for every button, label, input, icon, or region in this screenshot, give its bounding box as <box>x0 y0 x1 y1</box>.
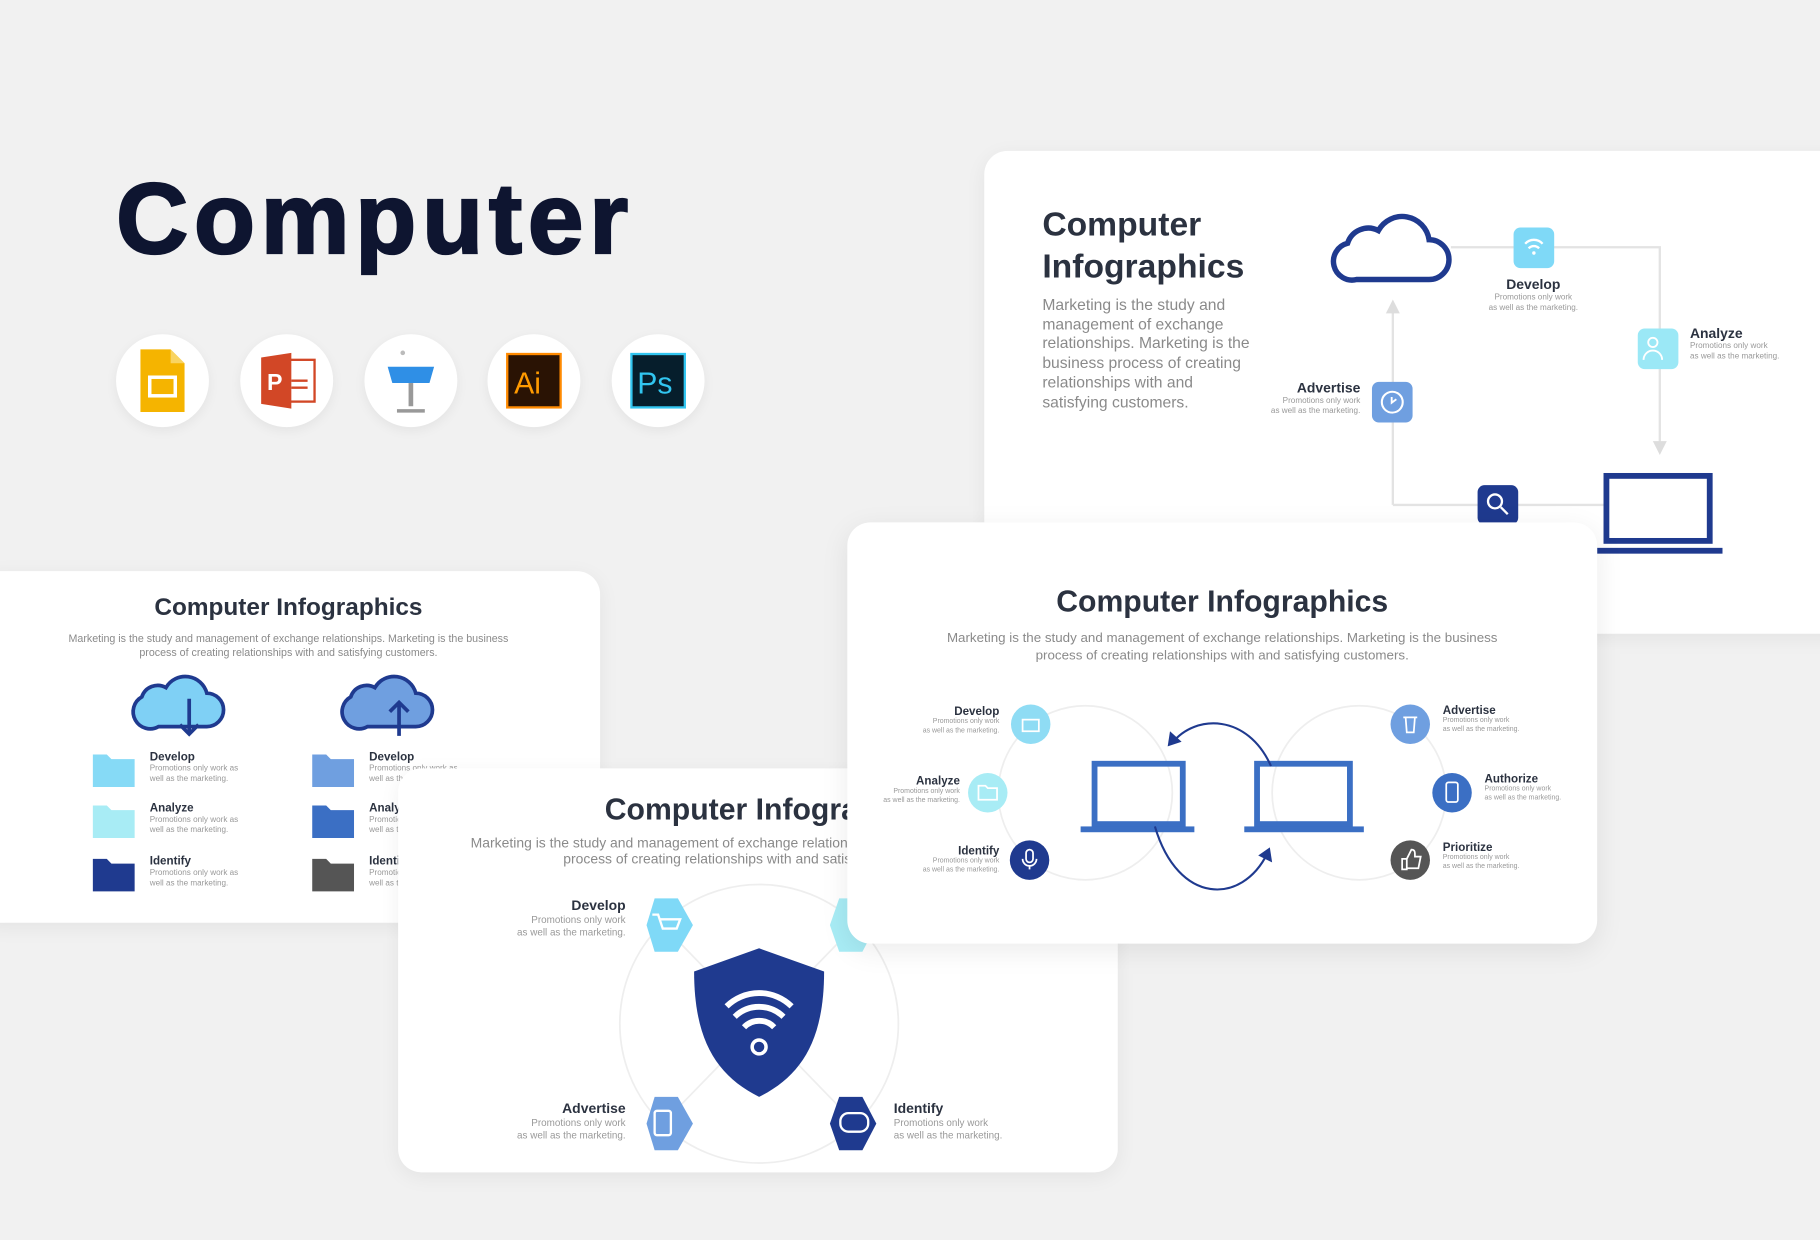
label: analyze: Promotions only work <box>1690 342 1768 351</box>
panel: left slide: Develop <box>369 751 414 764</box>
rows: well as the marketing. <box>150 775 228 783</box>
flow diagram <box>1330 214 1722 554</box>
panel: left slide: Promotions only work as <box>150 816 238 824</box>
panel: top-right slide <box>984 151 1820 634</box>
text block: process of creating relationships with and satisfying customers. <box>1036 648 1409 662</box>
left labels <box>923 706 1000 734</box>
icon: powerpoint <box>240 334 333 427</box>
right labels <box>1443 705 1519 733</box>
panel: left slide: Promotions only work as <box>150 869 238 877</box>
rows: Develop <box>150 751 195 764</box>
label: identify: as well as the marketing. <box>894 1129 1002 1140</box>
heading: Computer Infographics <box>1056 584 1388 619</box>
panel: left slide: well as the marketing. <box>369 880 448 888</box>
panel: left slide: well as the marketing. <box>150 880 228 888</box>
rows <box>150 751 238 783</box>
heading: Computer <box>1042 207 1201 244</box>
label: develop: Develop <box>571 897 626 913</box>
right labels: as well as the marketing. <box>1443 726 1519 733</box>
panel: middle slide: Prioritize <box>1443 842 1492 854</box>
app icons row <box>116 334 704 429</box>
label: develop: as well as the marketing. <box>517 926 626 937</box>
label: analyze <box>1690 325 1779 361</box>
label: advertise <box>517 1100 626 1140</box>
text block: Marketing is the study and management of exchange relationships. Marketing is the business <box>947 631 1497 645</box>
panel: left slide: Analyze <box>369 802 413 815</box>
panel: middle slide: Promotions only work <box>1485 786 1551 793</box>
icon: illustrator: Ai <box>514 367 541 400</box>
text block: Marketing is the study and management of exchange relationships. Marketing is the business process of creating relationships with and satisfying customers. <box>1042 296 1250 410</box>
panel: middle slide: as well as the marketing. <box>1443 863 1519 870</box>
panel: left slide: Promotions only work as <box>369 869 458 877</box>
panel: middle slide: as well as the marketing. <box>883 797 960 804</box>
panel: left slide: Promotions only work as <box>369 816 458 824</box>
left labels: as well as the marketing. <box>923 727 999 734</box>
text block: Marketing is the study and management of exchange relationships. Marketing is the business process of creating relationships with and satisfying customers. <box>69 633 508 658</box>
label: develop: Develop <box>1506 276 1560 292</box>
label: develop: as well as the marketing. <box>1489 304 1578 312</box>
icon: keynote <box>364 334 457 427</box>
panel: middle slide: Promotions only work <box>1443 854 1509 861</box>
panel: middle slide: as well as the marketing. <box>1485 795 1561 801</box>
text block: process of creating relationships with and satisfying customers. <box>563 851 953 867</box>
label: advertise: Advertise <box>1297 380 1360 396</box>
icon: google slides <box>116 334 209 427</box>
icon: photoshop <box>612 334 705 427</box>
rows: Promotions only work as <box>150 765 238 773</box>
label: advertise: Advertise <box>562 1100 626 1117</box>
right labels: Advertise <box>1443 705 1496 717</box>
text block <box>947 631 1497 662</box>
panel: left slide: Identify <box>369 855 410 868</box>
panel: middle slide: as well as the marketing. <box>923 866 999 873</box>
label: advertise: as well as the marketing. <box>517 1129 626 1140</box>
panel: left slide: Promotions only work as <box>369 765 458 773</box>
laptop <box>1606 476 1710 541</box>
text block: Marketing is the study and management of exchange relationships. Marketing is the business <box>471 835 1045 851</box>
panel: left slide: Analyze <box>150 802 194 815</box>
label: develop <box>1489 276 1578 312</box>
panel: middle slide: Promotions only work <box>893 788 960 795</box>
panel: left slide: well as the marketing. <box>150 826 228 835</box>
left labels: Promotions only work <box>933 718 999 725</box>
heading: Computer Infographics <box>605 792 937 826</box>
panel: bottom slide <box>398 768 1118 1172</box>
label: analyze: as well as the marketing. <box>1690 353 1779 361</box>
label: develop <box>517 897 626 938</box>
heading: Computer Infographics <box>154 594 422 621</box>
label: identify: Identify <box>894 1100 943 1117</box>
cloud <box>1333 216 1449 280</box>
label: advertise: Promotions only work <box>1283 397 1360 405</box>
laptop cycle diagram <box>968 704 1472 890</box>
icons <box>1514 227 1554 268</box>
panel: left slide: well as the marketing. <box>369 826 448 835</box>
panel: middle slide: Identify <box>958 845 999 858</box>
heading <box>1042 207 1244 286</box>
panel: left slide <box>0 571 600 923</box>
label: analyze: Analyze <box>1690 325 1743 341</box>
panel: middle slide: Analyze <box>916 775 960 788</box>
title: Computer <box>116 164 634 275</box>
icon: illustrator <box>487 334 580 427</box>
label: advertise <box>1271 380 1360 416</box>
label: identify: Promotions only work <box>894 1117 988 1128</box>
right labels: Promotions only work <box>1443 717 1509 724</box>
panel: left slide: Identify <box>150 855 191 868</box>
label: develop: Promotions only work <box>531 913 626 925</box>
clouds and folders <box>92 674 434 892</box>
label: develop: Promotions only work <box>1494 294 1572 302</box>
panel: left slide: well as the marketing. <box>369 775 448 783</box>
label: advertise: as well as the marketing. <box>1271 407 1360 416</box>
left labels: Develop <box>954 706 999 718</box>
label: identify <box>894 1100 1002 1140</box>
panel: middle slide: Authorize <box>1485 773 1538 786</box>
panel: middle slide: Promotions only work <box>933 858 999 865</box>
panel: middle slide <box>847 522 1597 944</box>
text block <box>471 835 1045 867</box>
icon: photoshop: Ps <box>637 367 672 400</box>
heading: Infographics <box>1042 248 1244 286</box>
icon: powerpoint: P <box>267 369 282 395</box>
label: advertise: Promotions only work <box>531 1117 626 1128</box>
shield diagram <box>619 884 900 1164</box>
